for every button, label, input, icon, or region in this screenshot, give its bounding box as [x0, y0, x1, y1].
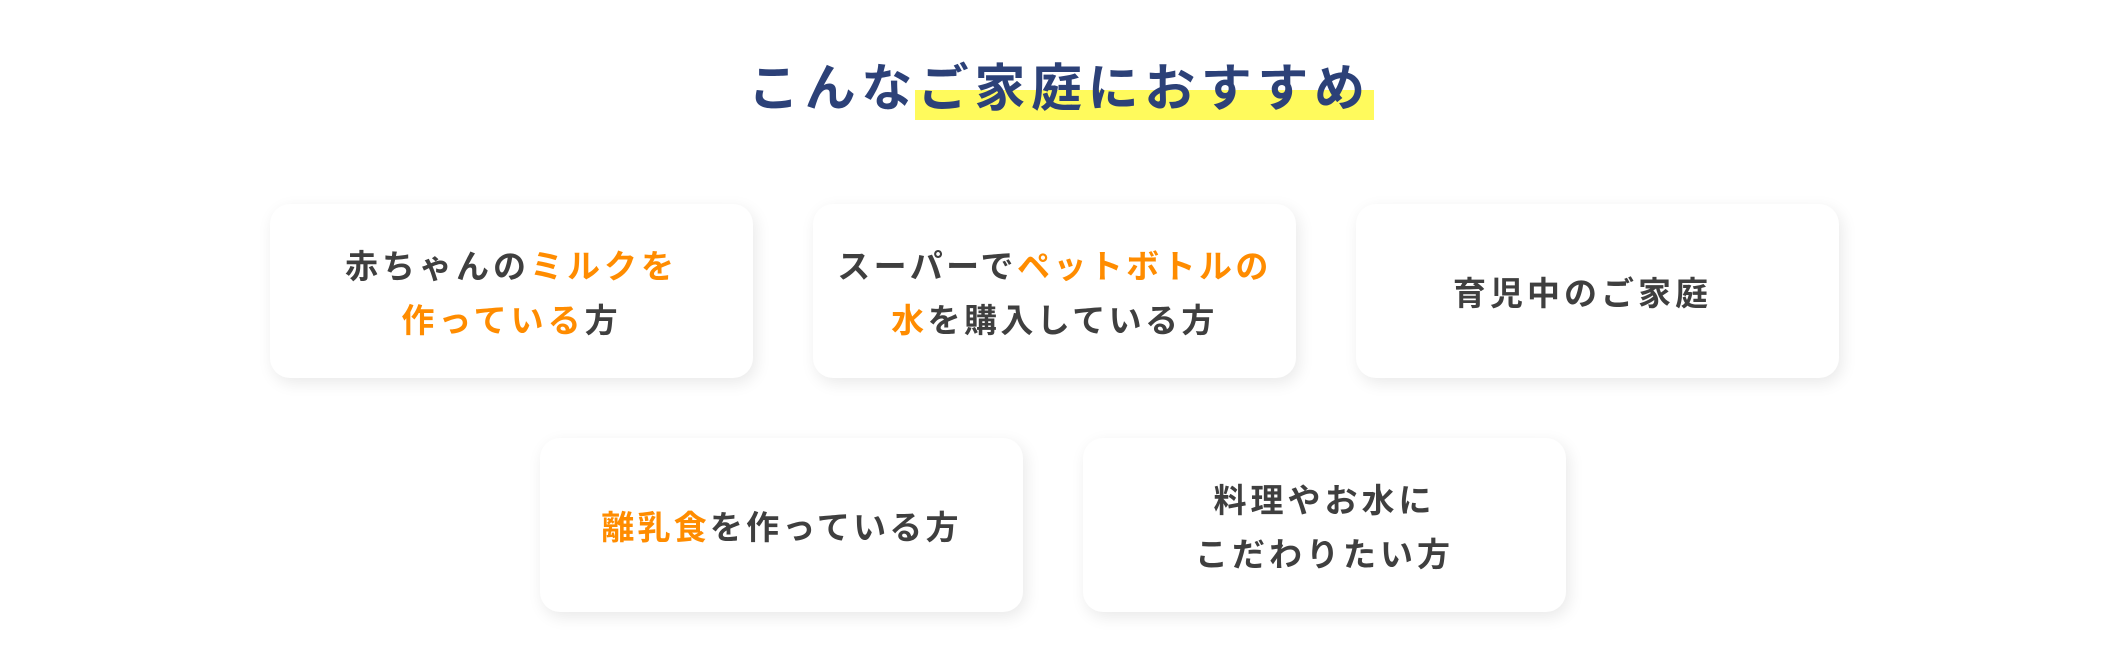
- card: milk: 作っている方: [401, 302, 622, 339]
- card: milk: 赤ちゃんのミルクを: [345, 248, 678, 285]
- card: parenting: [1356, 204, 1839, 378]
- card: pet bottle water: スーパーでペットボトルの: [837, 248, 1272, 285]
- card: parenting: 育児中のご家庭: [1453, 275, 1712, 312]
- card: pet bottle water: [813, 204, 1296, 378]
- card: particular about water: こだわりたい方: [1195, 536, 1454, 573]
- card: particular about water: 料理やお水に: [1214, 482, 1436, 519]
- card: baby food: [540, 438, 1023, 612]
- title: こんなご家庭におすすめ: [748, 60, 1371, 117]
- card: particular about water: [1083, 438, 1566, 612]
- card: pet bottle water: 水を購入している方: [891, 302, 1218, 339]
- card: baby food: 離乳食を作っている方: [601, 509, 962, 546]
- title highlight: [915, 90, 1374, 120]
- card: milk: [270, 204, 753, 378]
